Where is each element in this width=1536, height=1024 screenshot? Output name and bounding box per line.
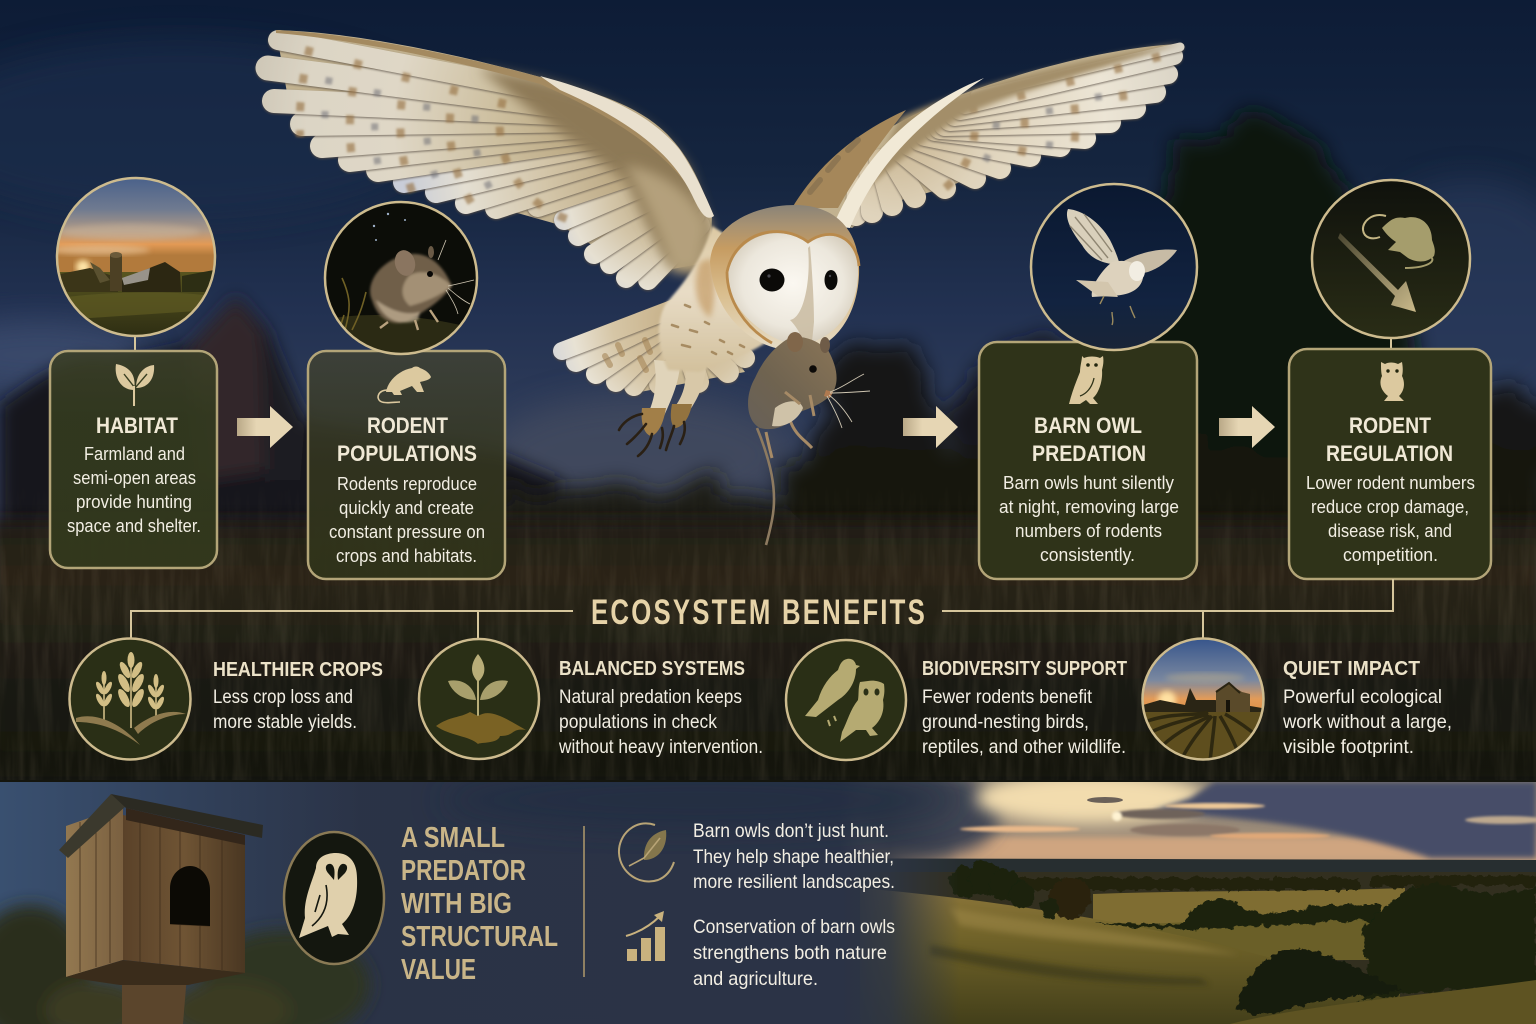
- body mottling: [696, 258, 715, 318]
- symbol ring: [1312, 180, 1470, 338]
- takeaway: conservation: strengthens both nature: [693, 942, 887, 964]
- description: [1306, 472, 1475, 565]
- description: Less crop loss and: [213, 686, 353, 708]
- description: Fewer rodents benefit: [922, 686, 1093, 708]
- owl body: [659, 226, 800, 372]
- symbol: falling rodent numbers: [1310, 178, 1472, 340]
- beak ridge: [790, 246, 814, 342]
- description: populations in check: [559, 711, 717, 733]
- conclusion title: PREDATOR: [401, 855, 526, 887]
- heading: PREDATION: [1032, 441, 1146, 466]
- takeaway: conservation: [693, 916, 895, 990]
- description: disease risk, and: [1328, 520, 1452, 541]
- description: crops and habitats.: [336, 545, 477, 566]
- connector: [134, 336, 136, 352]
- background: night farmland scene: [0, 0, 1536, 782]
- arrow: predation to regulation: [1219, 406, 1275, 448]
- owl eyes: [760, 268, 838, 292]
- photo ring: [57, 178, 215, 336]
- bottom band: landscape at sunset: [0, 770, 1536, 1024]
- heading: HEALTHIER CROPS: [213, 659, 383, 681]
- slate fade overlay: [700, 782, 954, 1024]
- step 3: barn owl predation: [979, 182, 1200, 579]
- foreground hill: [860, 888, 1400, 1024]
- heading: BALANCED SYSTEMS: [559, 658, 745, 680]
- post: [122, 975, 187, 1024]
- heading: QUIET IMPACT: [1283, 658, 1420, 680]
- description: quickly and create: [339, 497, 474, 518]
- golden fields: [1093, 888, 1405, 924]
- description: consistently.: [1040, 544, 1135, 565]
- right face: [123, 815, 245, 973]
- benefit: biodiversity support: [786, 640, 1127, 760]
- description: provide hunting: [76, 491, 192, 512]
- sunset sky: [858, 782, 1536, 860]
- divider: [583, 826, 585, 977]
- body speckles: [672, 305, 744, 354]
- underside: [66, 960, 245, 985]
- description: semi-open areas: [73, 467, 196, 488]
- captured mouse: [748, 332, 870, 545]
- badge: owl silhouette: [284, 832, 384, 964]
- central barn owl carrying a mouse: [268, 30, 1182, 545]
- description: [329, 473, 485, 566]
- photo: farm at sunset: [58, 179, 214, 335]
- description: at night, removing large: [999, 496, 1179, 517]
- description: [67, 443, 201, 536]
- facial disc: [728, 233, 858, 345]
- description: [999, 472, 1179, 565]
- icon: bird and owl: [786, 640, 906, 760]
- takeaway: shaping landscapes: Barn owls don’t just hunt.: [693, 820, 889, 842]
- takeaway: shaping landscapes: They help shape healthier,: [693, 846, 894, 868]
- step 4: rodent regulation: [1289, 178, 1491, 579]
- heading: HABITAT: [96, 413, 178, 438]
- description: more stable yields.: [213, 711, 357, 733]
- benefit: quiet impact: [1140, 636, 1452, 762]
- heading: BIODIVERSITY SUPPORT: [922, 658, 1127, 680]
- illustration: farm at dusk: [1144, 640, 1262, 758]
- description: space and shelter.: [67, 515, 201, 536]
- description: [558, 686, 763, 758]
- roof: [59, 794, 263, 858]
- icon: rising bar chart: [626, 911, 665, 961]
- connector lines to benefits: [131, 579, 1393, 640]
- arrow: habitat to rodents: [237, 406, 293, 448]
- photo ring: [325, 202, 477, 354]
- takeaway: conservation: Conservation of barn owls: [693, 916, 895, 938]
- left wing: [268, 30, 714, 280]
- conclusion title: WITH BIG: [401, 888, 512, 920]
- heading: [337, 413, 477, 466]
- description: reduce crop damage,: [1311, 496, 1469, 517]
- panel: [1289, 349, 1491, 579]
- panel: [979, 342, 1197, 579]
- step 2: rodent populations: [308, 200, 505, 579]
- heading: BARN OWL: [1034, 413, 1142, 438]
- icon: wheat: [70, 638, 190, 760]
- heading: [1326, 413, 1453, 466]
- description: Barn owls hunt silently: [1003, 472, 1175, 493]
- description: Natural predation keeps: [559, 686, 742, 708]
- left face: [66, 806, 123, 977]
- arrow: rodents to predation: [903, 406, 958, 448]
- icon: sprout: [419, 639, 539, 759]
- description: Farmland and: [84, 443, 185, 464]
- takeaway: shaping landscapes: [693, 820, 895, 893]
- entrance hole: [170, 866, 210, 926]
- conclusion title: STRUCTURAL: [401, 921, 558, 953]
- description: visible footprint.: [1283, 736, 1414, 758]
- description: [1282, 686, 1452, 758]
- icon: owl: [1380, 362, 1404, 401]
- description: work without a large,: [1282, 711, 1452, 733]
- benefit: balanced systems: [419, 639, 763, 759]
- description: constant pressure on: [329, 521, 485, 542]
- heading: RODENT: [367, 413, 448, 438]
- bottom grass: [1230, 980, 1536, 1024]
- panel: [308, 351, 505, 579]
- icon: mouse: [378, 366, 431, 403]
- description: reptiles, and other wildlife.: [922, 736, 1126, 758]
- icon: leaves: [116, 364, 154, 406]
- takeaway: conservation: and agriculture.: [693, 968, 818, 990]
- icon: leaf in arc: [619, 823, 674, 881]
- icon: owl: [1069, 356, 1103, 404]
- heading: REGULATION: [1326, 441, 1453, 466]
- distant hills: [858, 858, 1536, 872]
- description: [213, 686, 357, 733]
- description: Lower rodent numbers: [1306, 472, 1475, 493]
- panel: [50, 351, 217, 568]
- band separator: [0, 780, 1536, 782]
- heading: POPULATIONS: [337, 441, 477, 466]
- tree lines: [949, 861, 1536, 1015]
- disc rim: [727, 232, 859, 343]
- description: Powerful ecological: [1283, 686, 1442, 708]
- nest box on a post: [59, 794, 263, 1024]
- plank lines: [80, 811, 222, 972]
- description: Rodents reproduce: [337, 473, 477, 494]
- ecosystem benefits heading: ECOSYSTEM BENEFITS: [591, 593, 927, 632]
- description: without heavy intervention.: [558, 736, 763, 758]
- description: [922, 686, 1126, 758]
- description: ground-nesting birds,: [922, 711, 1089, 733]
- right wing: [792, 43, 1182, 228]
- step 1: habitat: [50, 176, 217, 568]
- takeaway: shaping landscapes: more resilient landscapes.: [693, 871, 895, 893]
- illustration ring: [1142, 638, 1264, 760]
- photo ring: [1031, 184, 1197, 350]
- connector: [1390, 336, 1392, 350]
- description: numbers of rodents: [1015, 520, 1162, 541]
- description: competition.: [1343, 544, 1438, 565]
- heading: [1032, 413, 1146, 466]
- owl head: [710, 205, 859, 350]
- conclusion title: A SMALL: [401, 822, 505, 854]
- photo: owl in flight: [1030, 182, 1200, 354]
- conclusion title: [401, 822, 558, 986]
- owl legs and talons: [619, 360, 706, 456]
- blurred foliage: [0, 905, 370, 1024]
- photo: mouse at night: [324, 200, 480, 360]
- conclusion title: VALUE: [401, 954, 476, 986]
- tail and under-wing feathers: [562, 296, 745, 392]
- heading: RODENT: [1349, 413, 1431, 438]
- benefit: healthier crops: [70, 638, 383, 760]
